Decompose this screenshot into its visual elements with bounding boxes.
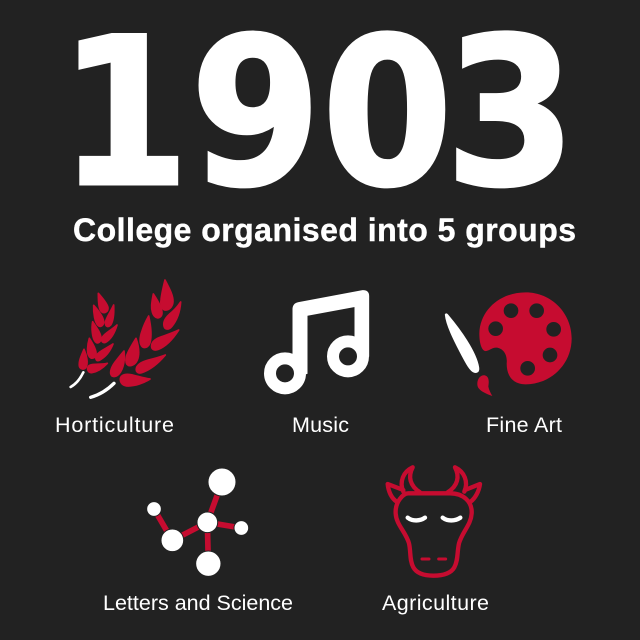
label: Letters and Science: Letters and Science bbox=[103, 591, 293, 615]
group: Letters and Science bbox=[103, 468, 293, 615]
icon: wheat bbox=[71, 280, 181, 397]
heading: College organised into 5 groups bbox=[73, 212, 576, 248]
label: Agriculture: Agriculture bbox=[382, 591, 489, 615]
icon: molecule bbox=[147, 468, 249, 576]
group: Agriculture bbox=[382, 467, 489, 615]
group: Music bbox=[270, 291, 368, 437]
group: Horticulture bbox=[55, 280, 181, 437]
icon: music note bbox=[270, 291, 368, 388]
icon: palette and brush bbox=[446, 292, 572, 396]
label: Music: Music bbox=[292, 413, 349, 437]
group: Fine Art bbox=[446, 292, 572, 437]
label: Fine Art: Fine Art bbox=[486, 413, 562, 437]
title: 1903: 1903 bbox=[59, 0, 576, 233]
icon: cow head bbox=[388, 467, 480, 576]
label: Horticulture: Horticulture bbox=[55, 413, 174, 437]
